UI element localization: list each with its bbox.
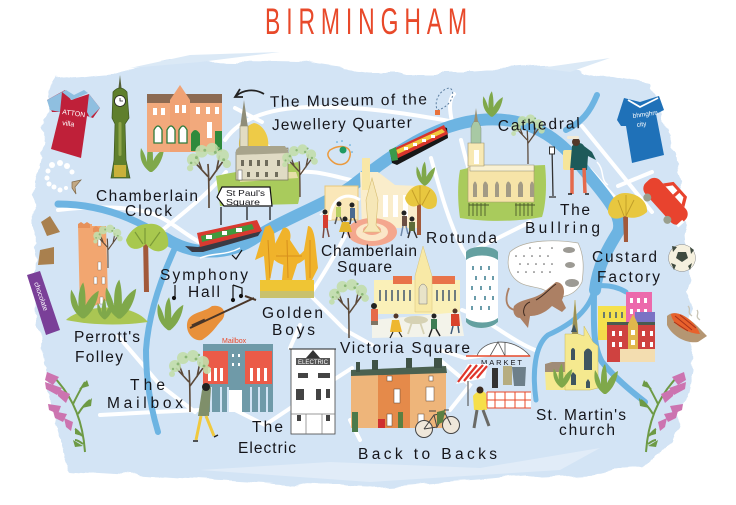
Mailbox building [203, 338, 273, 412]
icon: chocolate bar in purple wrapper: chocolate [32, 281, 49, 312]
label: The Mailbox: Mailbox [107, 395, 183, 412]
label: Symphony Hall [160, 267, 248, 301]
tree by the museum [187, 143, 231, 208]
icon: bitten chocolate pieces [38, 216, 60, 265]
foxglove right [639, 372, 686, 452]
label: Victoria Square: Victoria Square [340, 340, 470, 357]
label: Cathedral: Cathedral [498, 115, 580, 135]
dotted necklace icon [435, 88, 453, 115]
Rotunda tower [466, 247, 498, 328]
white road network [58, 94, 652, 440]
St Paul's Square sign: St Paul's [226, 188, 265, 198]
icon: football [668, 244, 696, 272]
St Paul's Square sign: Square [226, 197, 260, 207]
label: Golden Boys [262, 305, 323, 339]
label: Jewellery Quarter: Jewellery Quarter [272, 115, 412, 134]
Bullring bull statue [507, 282, 566, 328]
market stall [456, 342, 531, 408]
St Paul's Square sign [217, 187, 272, 225]
label: The Bullring: Bullring [525, 220, 600, 237]
St Martin's church [545, 300, 598, 390]
Victoria Square town hall [372, 246, 464, 338]
label: The Bullring: The [560, 202, 590, 219]
icon: Aston Villa red football shirt: ATTON [62, 109, 86, 119]
Custard Factory colourful buildings [598, 292, 655, 362]
label: Golden Boys: Golden [262, 305, 323, 322]
Chamberlain Square people [322, 202, 417, 238]
bicycle [416, 410, 460, 438]
St Philip's Cathedral and lawn [458, 108, 546, 221]
street lamp [549, 147, 556, 197]
The Electric cinema [289, 349, 336, 434]
icon: Birmingham City blue football shirt: bhmghm [632, 110, 658, 120]
man in yellow coat [473, 386, 489, 428]
label: St. Martin's church [536, 407, 626, 439]
plant north of square [416, 162, 435, 186]
foxglove left [45, 372, 92, 452]
Symphony music notes [172, 250, 242, 302]
icon: Aston Villa red football shirt: villa [62, 120, 75, 129]
label: Custard Factory [592, 249, 660, 286]
yellow tree by the canal [608, 193, 647, 242]
label: Rotunda: Rotunda [426, 230, 497, 247]
label: The Electric: Electric [238, 440, 296, 457]
panel: painted background wash [34, 52, 692, 488]
label: Perrott's Folley: Folley [75, 349, 123, 366]
icon: red mini car [636, 169, 698, 232]
yellow tree at Chamberlain Square [405, 185, 437, 235]
icon: Chamberlain clock tower [111, 75, 130, 178]
canal and river network [58, 95, 645, 432]
violin [187, 296, 256, 340]
label: Chamberlain Clock: Chamberlain [96, 188, 198, 205]
title: BIRMINGHAM [265, 0, 467, 42]
icon: small clasp [72, 180, 81, 194]
Perrott's Folly tower with garden [66, 222, 148, 324]
Mailbox building: Mailbox [222, 338, 247, 345]
label: Chamberlain Square [321, 243, 417, 276]
label: Custard Factory: Custard [592, 249, 657, 266]
label: St. Martin's church: St. Martin's [536, 407, 626, 424]
Jewellery Quarter museum building [147, 85, 222, 152]
label: Golden Boys: Boys [272, 322, 315, 339]
Bullring building [508, 241, 583, 297]
icon: chocolate bar in purple wrapper [27, 271, 60, 335]
Chamberlain Square building and fountain [325, 158, 418, 246]
Back to Backs terraced houses [351, 358, 447, 432]
label: Back to Backs: Back to Backs [358, 446, 497, 463]
label: The Electric [238, 419, 296, 457]
plant by the clock [140, 142, 164, 172]
label: The Mailbox: The [130, 377, 165, 394]
tree by Mailbox [169, 350, 211, 412]
The Electric cinema: ELECTRIC [298, 360, 329, 366]
icon: Birmingham City blue football shirt [617, 96, 664, 163]
label: Custard Factory: Factory [597, 269, 660, 286]
label: Perrott's Folley [74, 329, 140, 366]
St Paul's church and lawn [216, 100, 300, 206]
Jewellery Quarter ring icon [328, 140, 353, 164]
label: The Bullring [525, 202, 600, 237]
icon: Aston Villa red football shirt [47, 90, 100, 158]
icon: balti dish [667, 306, 707, 342]
museum pointer arrow [235, 89, 264, 97]
label: St. Martin's church: church [559, 422, 615, 439]
Jewellery Quarter narrowboat [389, 125, 448, 165]
market stall: MARKET [481, 358, 522, 367]
label: The Museum of the: The Museum of the [270, 91, 427, 111]
label: Symphony Hall: Symphony [160, 267, 248, 284]
icon: Birmingham City blue football shirt: city [636, 121, 648, 129]
map labels [74, 91, 660, 463]
label: Chamberlain Clock: Clock [125, 203, 172, 220]
tree: green at Symphony Hall [126, 224, 168, 292]
icon: white dotted ring [44, 160, 74, 192]
label: Chamberlain Square: Chamberlain [321, 243, 417, 260]
tree beside St Paul's [282, 144, 318, 197]
plants by St Martin's [553, 364, 572, 388]
Victoria Square people [371, 303, 460, 338]
label: Perrott's Folley: Perrott's [74, 329, 140, 346]
label: The Mailbox [107, 377, 183, 412]
walking woman [193, 383, 218, 441]
second plant by St Martin's [594, 364, 618, 394]
label: The Electric: The [252, 419, 283, 436]
label: Symphony Hall: Hall [188, 284, 220, 301]
tree at cathedral [511, 114, 545, 164]
Symphony narrowboat [185, 220, 262, 252]
label: Chamberlain Clock [96, 188, 198, 220]
shopper woman [563, 136, 596, 194]
Golden Boys statue [255, 225, 318, 298]
label: Chamberlain Square: Square [337, 259, 392, 276]
plant by the river [157, 297, 183, 330]
plant by cathedral [483, 91, 503, 117]
tree south of Chamberlain Square [329, 279, 369, 338]
